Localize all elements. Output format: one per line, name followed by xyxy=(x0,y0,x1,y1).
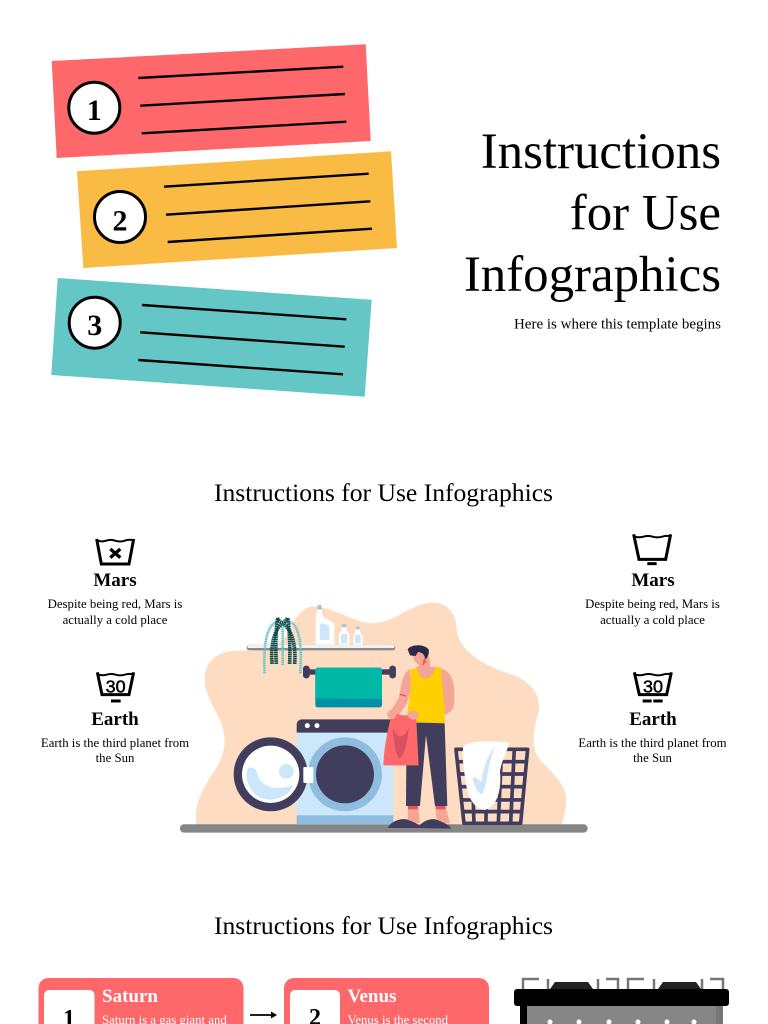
chest and neck xyxy=(416,667,437,685)
arms xyxy=(391,669,412,718)
person xyxy=(383,645,454,829)
card: Venus xyxy=(284,978,489,1024)
item: Earth left xyxy=(41,672,189,765)
towel rail and towel xyxy=(303,666,396,707)
hands xyxy=(387,710,397,719)
icon: stove xyxy=(514,979,729,1024)
item: Mars left: Mars xyxy=(93,570,137,591)
item: Mars left xyxy=(48,539,182,627)
item: Mars right: Despite being red, Mars is xyxy=(585,597,720,611)
tank top xyxy=(406,667,445,723)
item: Earth right xyxy=(578,672,727,765)
strip 2: yellow: 2 xyxy=(112,204,128,238)
section heading 3: Instructions for Use Infographics xyxy=(214,911,553,940)
white cloth xyxy=(463,741,509,810)
icon: wash empty tub xyxy=(634,534,671,564)
illustration: laundry room xyxy=(180,603,588,833)
strip 2: yellow xyxy=(77,151,397,268)
arrow xyxy=(250,1012,277,1018)
icon: wash 30 two bars: 30 xyxy=(643,677,663,697)
item: Mars right xyxy=(585,534,720,627)
floor xyxy=(180,824,588,833)
item: Mars right: actually a cold place xyxy=(600,613,705,627)
title: Infographics xyxy=(464,247,721,303)
item: Earth left: the Sun xyxy=(96,751,135,765)
item: Earth right: the Sun xyxy=(633,751,672,765)
background blob xyxy=(196,603,566,825)
item: Earth left: Earth xyxy=(91,709,139,730)
icon: wash 30 two bars xyxy=(634,672,671,701)
head xyxy=(413,650,427,664)
item: Mars left: Despite being red, Mars is xyxy=(48,597,182,611)
strip 3: teal: 3 xyxy=(87,309,102,342)
plant xyxy=(264,618,301,673)
icon: wash 30 one bar: 30 xyxy=(106,677,126,697)
bottles xyxy=(316,605,363,645)
item: Earth right: Earth is the third planet from xyxy=(578,736,727,750)
laundry basket xyxy=(456,741,528,823)
title xyxy=(464,124,721,303)
card: Saturn xyxy=(38,978,244,1024)
card: Venus: Venus xyxy=(348,986,396,1007)
title: for Use xyxy=(570,186,721,242)
card: Saturn: Saturn xyxy=(102,986,158,1007)
section heading 2: Instructions for Use Infographics xyxy=(214,478,553,507)
held cloth xyxy=(383,711,419,765)
panel: numbered list graphic xyxy=(51,44,397,397)
icon: wash do not xyxy=(97,539,134,564)
strip 1: red: 1 xyxy=(87,94,102,127)
subtitle: Here is where this template begins xyxy=(514,316,721,332)
title: Instructions xyxy=(481,124,721,180)
legs and feet xyxy=(407,808,420,823)
strip 3: teal xyxy=(51,278,372,397)
item: Mars right: Mars xyxy=(631,570,675,591)
item: Earth left: Earth is the third planet from xyxy=(41,736,189,750)
strip 1: red xyxy=(52,44,371,158)
washing machine xyxy=(234,719,393,824)
shelf xyxy=(247,645,395,650)
icon: wash 30 one bar xyxy=(97,672,134,701)
item: Earth right: Earth xyxy=(629,709,677,730)
trousers xyxy=(406,723,447,806)
item: Mars left: actually a cold place xyxy=(63,613,168,627)
